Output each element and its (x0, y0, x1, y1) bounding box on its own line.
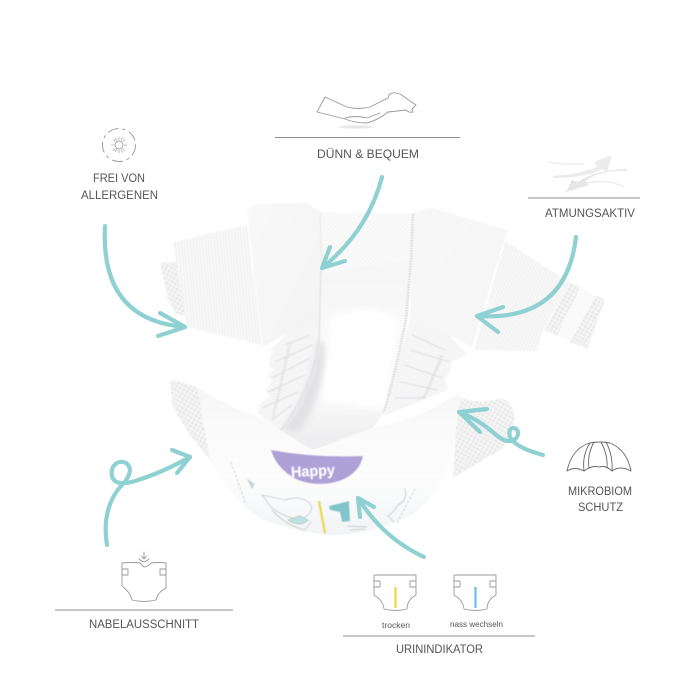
yellow indicator line (319, 501, 325, 533)
icon: diaper with navel cut (122, 552, 166, 602)
left back panel (247, 203, 322, 347)
label: NABELAUSSCHNITT (89, 619, 199, 631)
center topsheet (320, 212, 413, 413)
arrow: urinindikator (358, 498, 424, 557)
blue number print (329, 501, 350, 522)
left front mesh (170, 380, 218, 468)
right tab (543, 282, 605, 349)
divider (343, 635, 535, 637)
arrow: mikrobiom (459, 409, 543, 455)
right back panel (410, 207, 507, 347)
left striped ear (173, 225, 262, 345)
icon: dry diaper (374, 575, 416, 610)
icon: wet diaper (454, 575, 496, 610)
arrow: nabelausschnitt (106, 450, 190, 545)
label: FREI VON (93, 173, 145, 185)
icon: umbrella (567, 442, 631, 471)
label: DÜNN & BEQUEM (317, 149, 419, 161)
purple happy badge: Happy (291, 462, 336, 481)
label: ATMUNGSAKTIV (545, 208, 635, 220)
left mesh tab (160, 262, 186, 316)
arrow: frei von allergenen (105, 226, 185, 336)
icon: airflow arrows (548, 155, 627, 192)
label: URININDIKATOR (396, 644, 483, 656)
feature: frei von allergenen: ALLERGENEN (81, 190, 158, 202)
right front mesh (453, 397, 515, 478)
front waistband (197, 387, 460, 535)
divider (55, 609, 233, 611)
print: animal drawing (262, 495, 312, 530)
divider (275, 136, 460, 138)
feature: duenn und bequem (275, 93, 460, 161)
arrow: duenn und bequem (322, 177, 382, 268)
feature: atmungsaktiv (528, 155, 640, 220)
caption: trocken: trocken (382, 621, 410, 630)
feature: nabelausschnitt (55, 552, 233, 631)
print: wavy line and dashes (231, 462, 415, 530)
icon: dashed circle with sun (102, 128, 136, 162)
feature: urinindikator (343, 575, 535, 656)
divider (528, 197, 640, 199)
feature: frei von allergenen (81, 128, 158, 202)
right leg ruffle (384, 320, 467, 416)
absorbent core (279, 212, 413, 450)
purple happy badge (271, 450, 363, 484)
icon: thin diaper (317, 93, 416, 129)
arrow: atmungsaktiv (477, 237, 576, 332)
label: MIKROBIOM (568, 486, 632, 498)
feature: mikrobiom schutz: SCHUTZ (578, 502, 623, 514)
left leg ruffle (257, 320, 320, 432)
caption: nass wechseln: nass wechseln (450, 620, 503, 629)
feature: mikrobiom schutz (567, 442, 632, 514)
diaper illustration (160, 203, 605, 535)
right striped ear (474, 241, 571, 351)
